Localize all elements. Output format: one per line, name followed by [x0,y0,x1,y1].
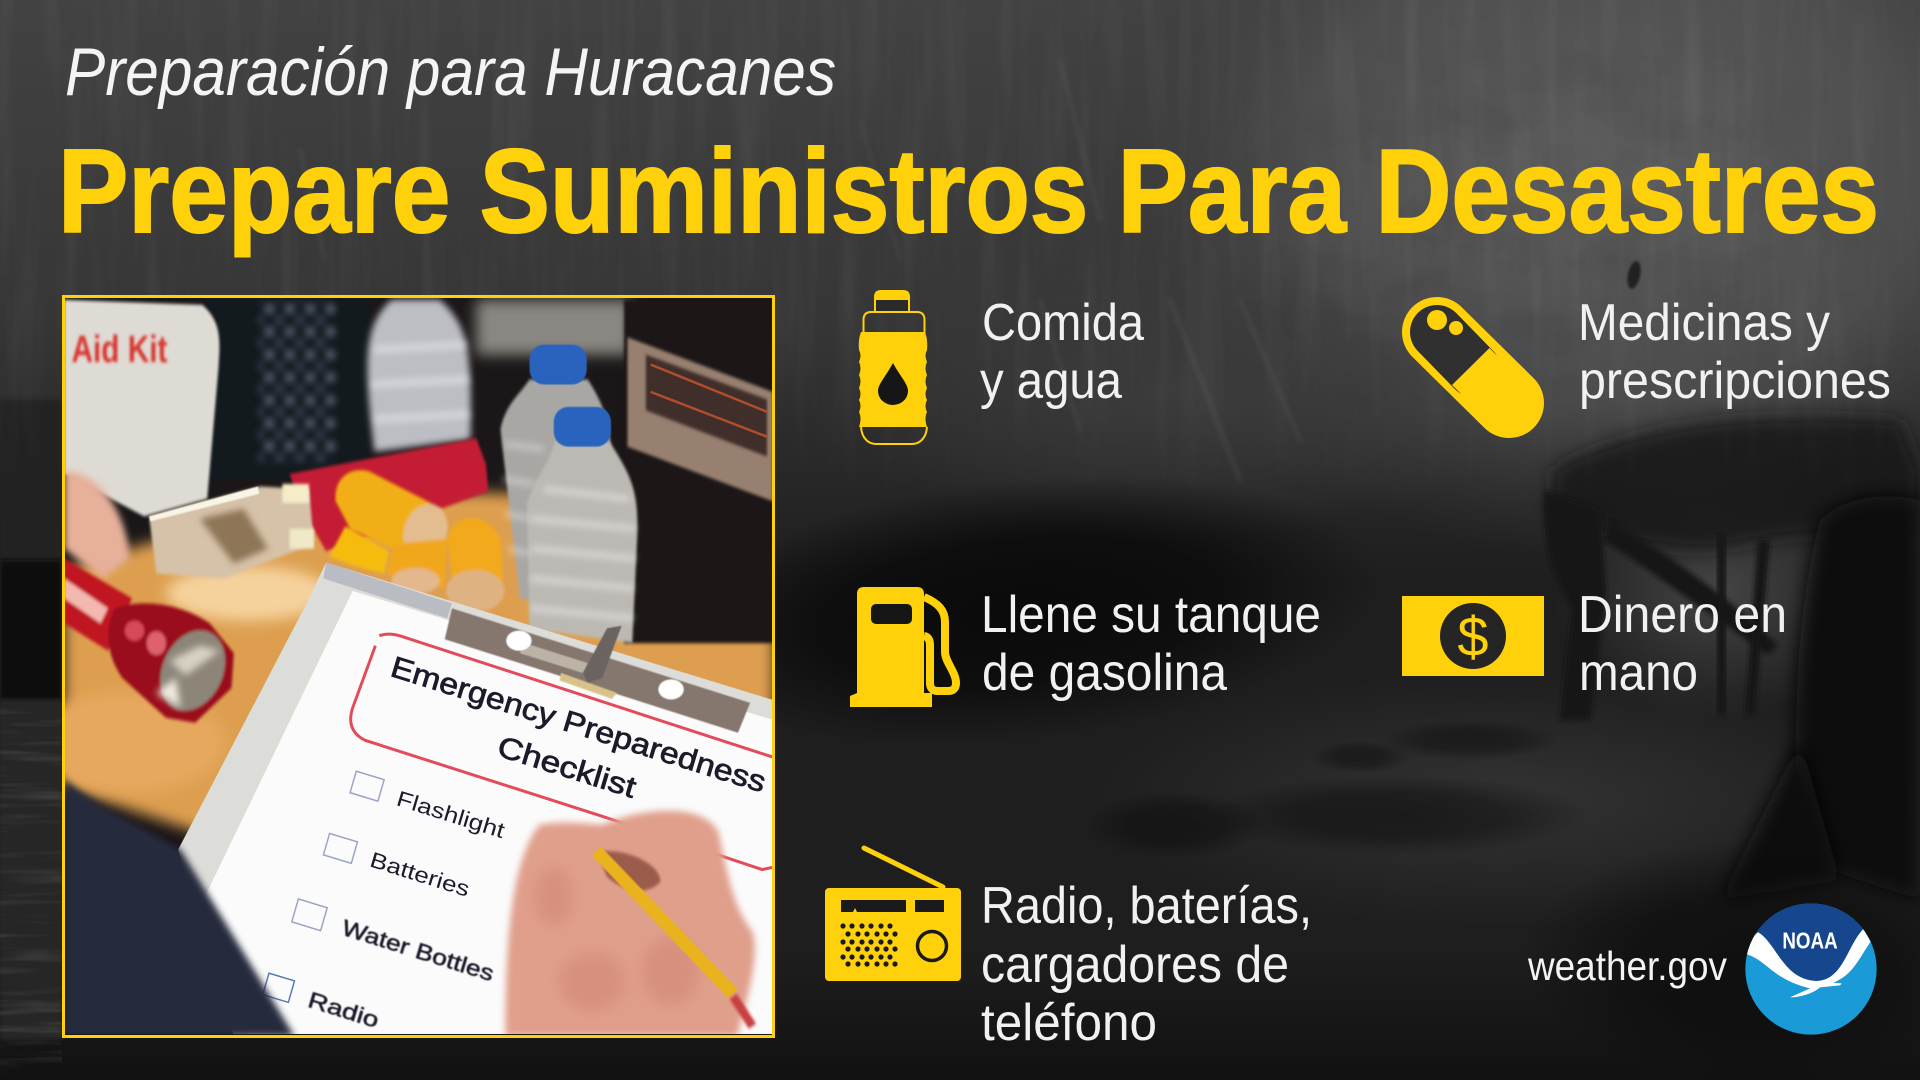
photo: checklist text: Water Bottles [339,915,497,986]
photo: red flashlight [64,559,238,723]
label: Llene su tanque de gasolina: Llene su tanque [981,586,1321,644]
photo: checklist text: Checklist [494,730,640,805]
ground mounds [1085,720,1920,1080]
website: weather.gov: weather.gov [1527,943,1727,989]
photo: checklist red title box [351,634,774,870]
cloud texture and rain [510,126,750,168]
photo: person's dark sleeve [64,780,294,1036]
photo: first aid kit: Aid Kit [72,328,167,370]
photo: checklist text: Batteries [367,847,473,902]
photo: checklist text: Emergency Preparedness [387,650,770,799]
label: Llene su tanque de gasolina: de gasolina [982,644,1227,702]
icon: medicine capsule [1427,310,1540,432]
icon: dollar bill [1402,596,1544,676]
label: Comida y agua [980,294,1144,410]
photo: checklist text [305,650,770,1033]
photo: metal clip [445,608,750,733]
label: Radio, baterías, cargadores de teléfono: teléfono [981,994,1157,1052]
photo: clipboard with checklist [178,563,774,1036]
photo: red tool and can opener [149,438,488,578]
photo: front water bottles [500,345,637,643]
icon: portable radio [825,848,961,981]
left-edge buildings and water [0,400,62,1080]
label: Medicinas y prescripciones: Medicinas y [1578,294,1830,352]
label: Radio, baterías, cargadores de teléfono [981,877,1312,1052]
photo: batteries [328,470,504,612]
label: Medicinas y prescripciones: prescripciones [1579,352,1891,410]
photo: rear water bottle [367,300,471,452]
icon: gas pump [850,587,956,707]
label: Dinero en mano [1578,586,1787,702]
photo: radio [624,300,774,643]
logo: NOAA: NOAA [1782,927,1838,953]
panel: photo of emergency supplies and checklist [30,296,774,1036]
photo: checklist text: Flashlight [394,785,508,843]
label: Comida y agua: Comida [982,294,1144,352]
label: Dinero en mano: mano [1579,644,1698,702]
icon: dollar bill: $ [1457,605,1489,668]
photo: checklist text: Radio [305,987,382,1033]
photo: first aid kit [64,300,219,578]
label: Medicinas y prescripciones [1578,294,1891,410]
label: Dinero en mano: Dinero en [1578,586,1787,644]
label: Comida y agua: y agua [980,352,1122,410]
palm trees [1544,417,1920,900]
small heading: Preparación para Huracanes: Preparación para Huracanes [65,34,836,110]
photo: table and dark backdrop [65,298,772,840]
photo: checkboxes [263,771,384,1002]
photo: hand writing with pencil [505,811,755,1036]
icon: water bottle [859,290,927,444]
photo: dark bag with sparkles [258,300,336,464]
label: Llene su tanque de gasolina [981,586,1321,702]
label: Radio, baterías, cargadores de teléfono: Radio, baterías, [981,877,1312,935]
hurricane eye [1625,260,1643,290]
logo: NOAA [1745,903,1877,1035]
label: Radio, baterías, cargadores de teléfono: cargadores de [981,936,1289,994]
